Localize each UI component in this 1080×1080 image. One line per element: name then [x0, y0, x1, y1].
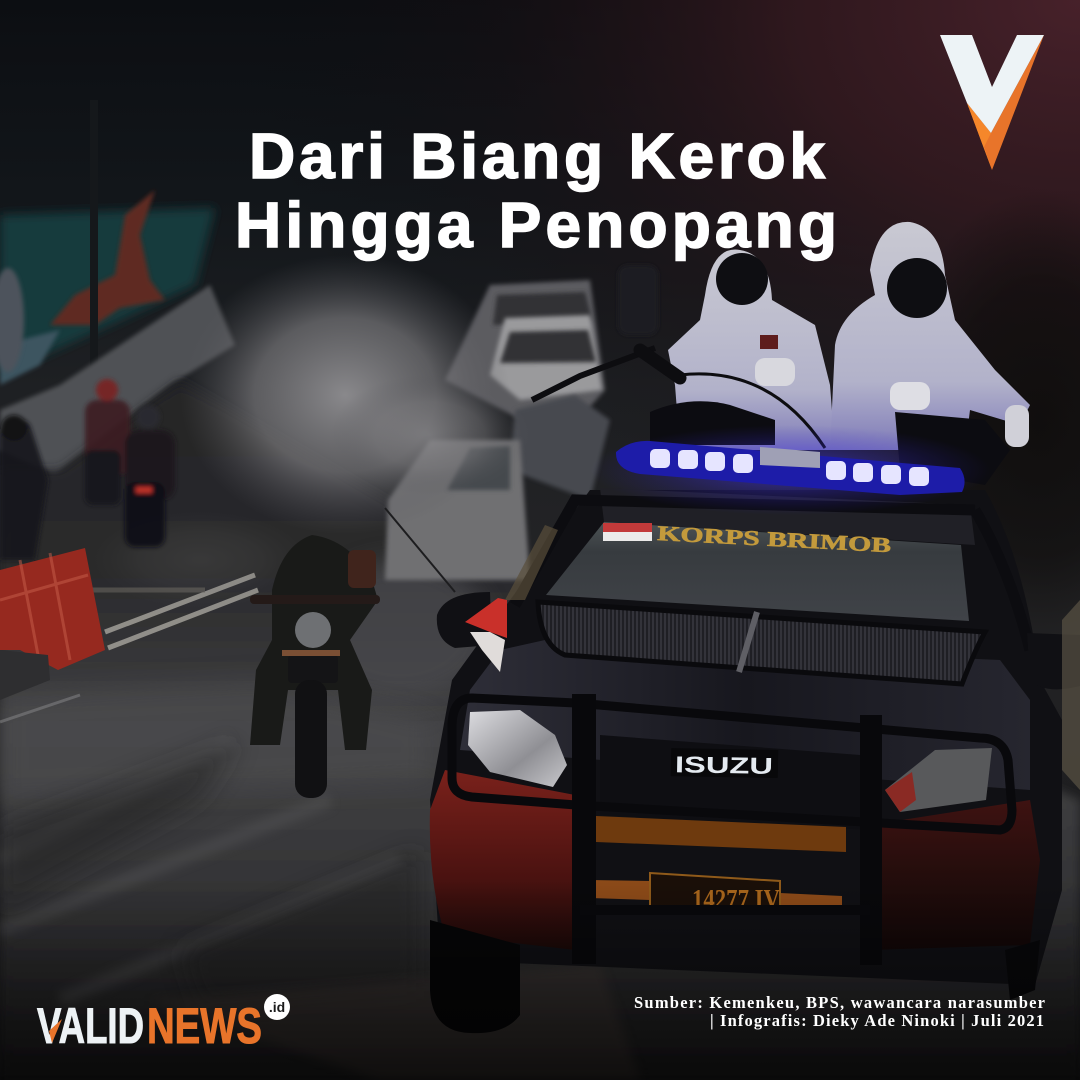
- motorcyclists at left: [0, 379, 175, 560]
- source credit: Sumber: Kemenkeu, BPS, wawancara narasumber: [634, 993, 1045, 1012]
- title: Dari Biang Kerok: [249, 120, 825, 192]
- sprayer lance: [532, 348, 825, 448]
- officer right: [830, 222, 1030, 485]
- right mirror: [1027, 633, 1080, 689]
- windscreen flag: [603, 523, 652, 541]
- rider on motorcycle: [250, 508, 455, 798]
- Validnews V logo mark: [940, 35, 1044, 170]
- side passengers: [1062, 600, 1080, 790]
- bottom dark fade: [0, 880, 1080, 1080]
- VALIDNEWS.id wordmark: .id: [269, 999, 285, 1015]
- bull bar: [452, 698, 1012, 830]
- VALIDNEWS.id wordmark: VALID: [37, 998, 144, 1054]
- roof rack mesh: [538, 602, 985, 684]
- police pickup truck: [430, 488, 1080, 1033]
- officers in white hazmat suits with sprayer: [532, 222, 1030, 485]
- lower orange stripes: [590, 880, 842, 914]
- orange bumper stripe: [596, 816, 846, 852]
- cars in the spray mist: [385, 265, 658, 580]
- number plate: 14277 IV: [692, 884, 780, 914]
- red road barriers: [0, 548, 105, 700]
- left headlight: [468, 710, 567, 787]
- blue emergency light bar: [590, 425, 990, 515]
- windscreen: [546, 522, 969, 621]
- roll bars: [515, 500, 1030, 650]
- number plate: [650, 873, 780, 914]
- windscreen sticker: KORPS BRIMOB: [657, 521, 892, 557]
- VALIDNEWS.id wordmark: [37, 994, 290, 1054]
- left mirror: [437, 592, 492, 648]
- ISUZU badge: [671, 748, 778, 779]
- left red bumper: [430, 770, 575, 950]
- source credit: [634, 993, 1045, 1030]
- flag on wing: [465, 598, 507, 672]
- title: Hingga Penopang: [235, 189, 837, 261]
- road surface: [0, 380, 1080, 1080]
- roof: [600, 488, 975, 545]
- right red bumper: [870, 800, 1040, 950]
- left tyre: [430, 920, 520, 1033]
- overpass and statue at left: [0, 100, 235, 475]
- VALIDNEWS.id wordmark: NEWS: [147, 998, 262, 1054]
- right tyre: [1005, 940, 1040, 1000]
- disinfectant spray mist: [90, 255, 530, 610]
- hood: [460, 640, 1030, 790]
- officer left: [650, 250, 835, 450]
- title: [235, 120, 837, 261]
- grille: [600, 735, 870, 830]
- ISUZU badge: ISUZU: [675, 751, 773, 779]
- source credit: | Infografis: Dieky Ade Ninoki | Juli 2021: [710, 1011, 1044, 1030]
- truck body: [430, 490, 1062, 985]
- right headlight: [885, 748, 992, 812]
